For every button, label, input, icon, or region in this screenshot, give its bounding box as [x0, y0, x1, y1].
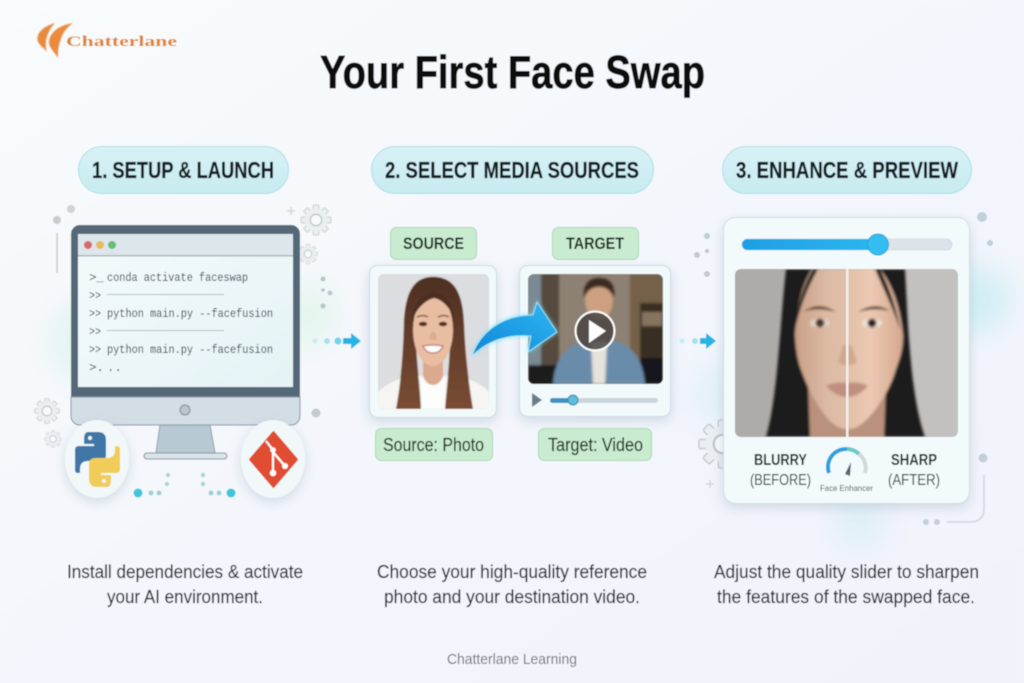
- terminal window: conda activate faceswap: [107, 271, 248, 285]
- monitor: [71, 225, 300, 459]
- arrow: step 1 to step 2: [312, 333, 361, 349]
- caption: step 2: [377, 562, 647, 607]
- label: sharp after: (AFTER): [888, 472, 940, 489]
- terminal window: ..: [107, 361, 122, 375]
- terminal window: >>: [89, 307, 101, 321]
- label: blurry before: BLURRY: [754, 452, 807, 469]
- label: Target: Video: [538, 428, 652, 460]
- comparison divider: [846, 269, 848, 437]
- panel: step 3 enhance and preview: [694, 146, 993, 607]
- label: sharp after: SHARP: [891, 452, 937, 469]
- quality slider: [742, 234, 952, 255]
- icon: feather mark: [37, 23, 73, 58]
- video player controls: [532, 393, 658, 407]
- panel: step 1 setup and launch: [35, 146, 333, 607]
- terminal window: >.: [89, 361, 104, 375]
- label: TARGET: [552, 228, 638, 260]
- caption: step 3: the features of the swapped face.: [717, 587, 975, 607]
- label: sharp after: [888, 452, 940, 489]
- terminal window: >>: [89, 325, 101, 339]
- caption: step 1: Install dependencies & activate: [67, 562, 303, 582]
- caption: step 1: your AI environment.: [107, 587, 263, 607]
- label: TARGET: TARGET: [566, 234, 625, 253]
- label: Source: Photo: Source: Photo: [383, 435, 484, 455]
- caption: step 2: photo and your destination video.: [384, 587, 640, 607]
- decorative gear and dots: [694, 212, 993, 525]
- logo: Chatterlane: [37, 23, 178, 58]
- label: blurry before: [750, 452, 811, 489]
- terminal window: python main.py --facefusion: [107, 307, 273, 321]
- card: source photo: [370, 266, 496, 418]
- terminal window: [78, 234, 293, 387]
- panel: step 2 select media sources: [370, 146, 670, 607]
- icon: face enhancer gauge: [820, 449, 873, 493]
- video frame: man speaking: [528, 274, 663, 385]
- monitor body: [71, 225, 300, 425]
- heading pill: step 1: [78, 146, 288, 194]
- decorative gears and dots: [35, 205, 333, 447]
- heading pill: step 2: 2. SELECT MEDIA SOURCES: [385, 157, 639, 183]
- terminal window: python main.py --facefusion: [107, 343, 273, 357]
- terminal window: >>: [89, 289, 101, 303]
- heading pill: step 3: 3. ENHANCE & PREVIEW: [736, 157, 958, 183]
- terminal window: >_: [89, 271, 104, 285]
- wordmark: Chatterlane: [66, 34, 178, 50]
- monitor stand: [156, 425, 215, 453]
- arrow: step 2 to step 3: [680, 333, 716, 349]
- arrow: source to target: [472, 302, 557, 356]
- icon: git badge: [241, 420, 305, 498]
- heading pill: step 1: 1. SETUP & LAUNCH: [92, 157, 274, 183]
- connector dots below monitor: [134, 473, 236, 498]
- caption: step 2: Choose your high-quality reference: [377, 562, 647, 582]
- heading pill: step 3: [722, 146, 972, 194]
- icon: face enhancer gauge: Face Enhancer: [820, 483, 873, 493]
- caption: step 1: [67, 562, 303, 607]
- card: enhancer preview: [724, 218, 970, 504]
- terminal window: >>: [89, 343, 101, 357]
- comparison photo: blurry and sharp face: [735, 269, 958, 437]
- label: blurry before: (BEFORE): [750, 472, 811, 489]
- label: SOURCE: [390, 228, 476, 260]
- play button: [576, 312, 614, 350]
- label: SOURCE: SOURCE: [403, 234, 464, 253]
- label: Source: Photo: [376, 428, 492, 460]
- caption: step 3: [714, 562, 979, 607]
- icon: python badge: [65, 420, 129, 498]
- photo: smiling woman: [378, 274, 489, 409]
- caption: step 3: Adjust the quality slider to sharpen: [714, 562, 979, 582]
- label: Target: Video: Target: Video: [548, 435, 643, 455]
- title: Your First Face Swap: [320, 46, 705, 98]
- heading pill: step 2: [372, 146, 654, 194]
- card: target video: [520, 266, 670, 416]
- footer: Chatterlane Learning: [447, 652, 577, 668]
